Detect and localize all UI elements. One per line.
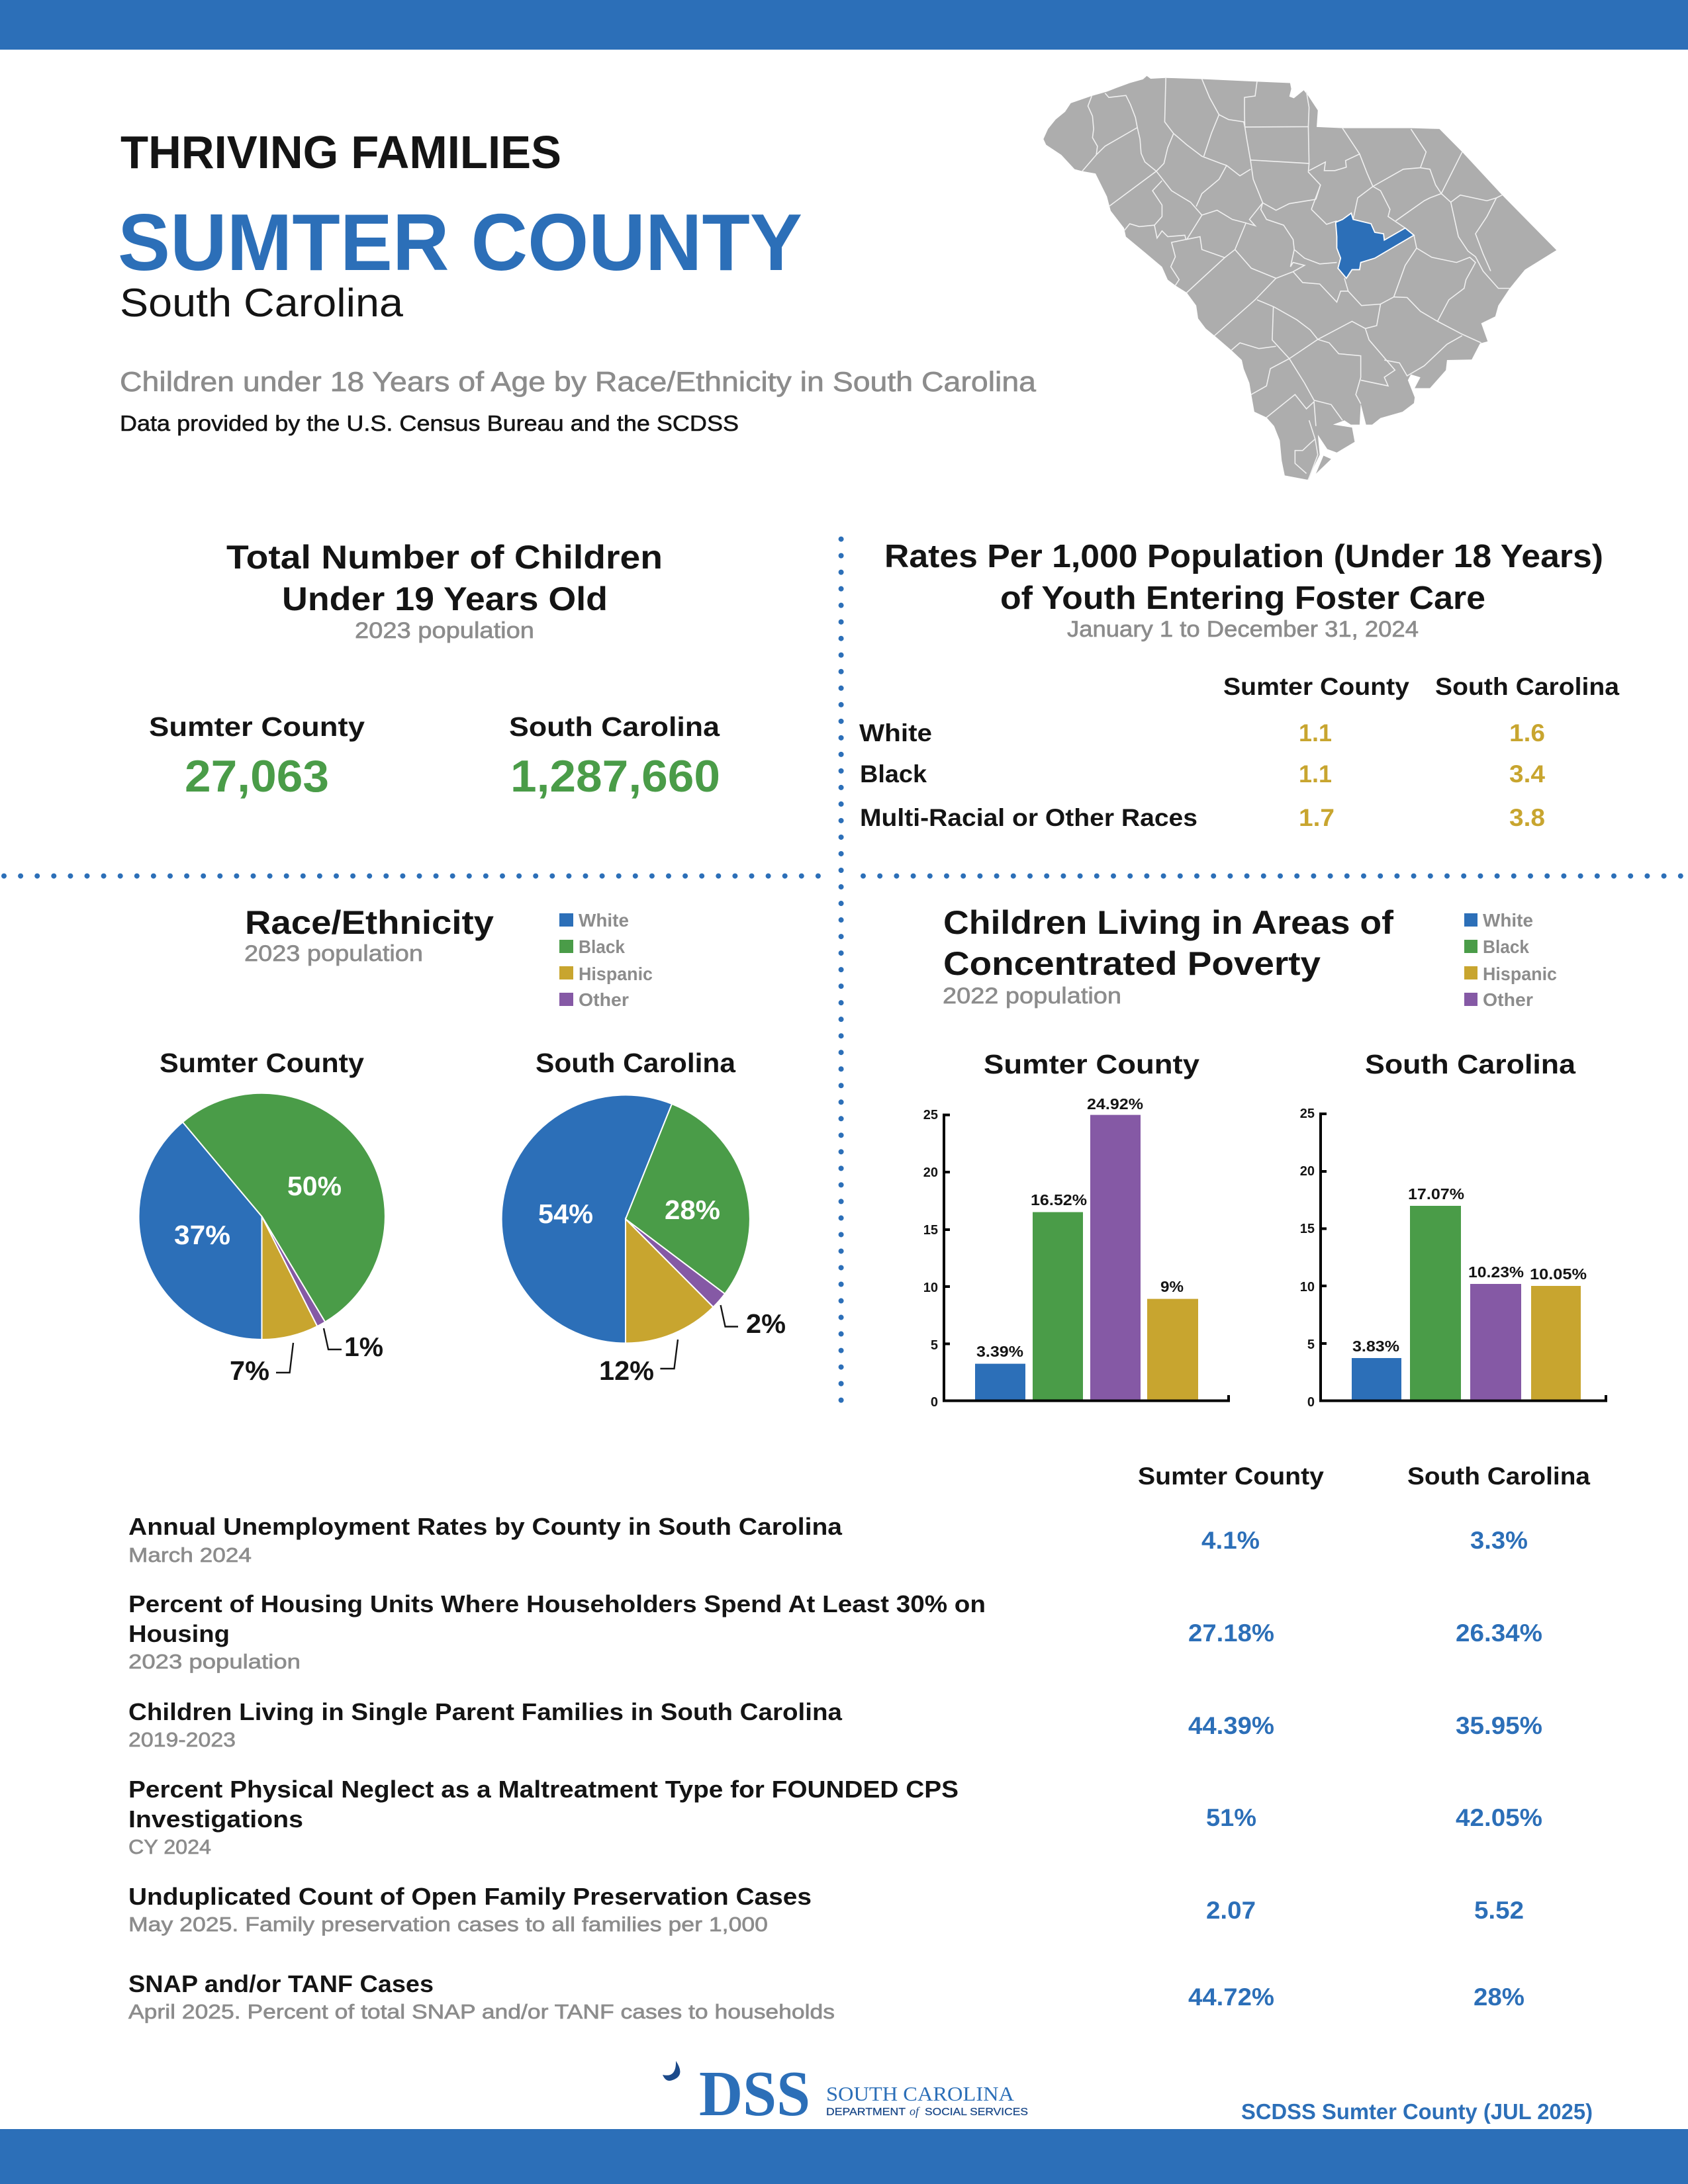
row: single parent families: Children Living in Single Parent Families in South Carolina (128, 1698, 843, 1725)
chart title: South Carolina: South Carolina (536, 1048, 736, 1078)
row: SNAP and TANF: SNAP and/or TANF Cases (128, 1970, 434, 1997)
state subtitle: South Carolina (120, 281, 404, 325)
row: physical neglect (128, 1776, 1542, 1858)
pie chart: Sumter County (139, 1093, 385, 1340)
row: physical neglect: CY 2024 (128, 1835, 211, 1858)
row: SNAP and TANF: 28% (1474, 1983, 1524, 2011)
row: housing cost: 2023 population (128, 1650, 301, 1673)
pie callout: 12% (599, 1340, 678, 1386)
row: White: 1.1 (1299, 719, 1332, 747)
subheading: 2023 population (244, 941, 423, 966)
row: single parent families: 44.39% (1188, 1712, 1274, 1739)
bar chart: South Carolina: 0 (1307, 1395, 1315, 1410)
pie chart: Sumter County: 37% (174, 1220, 230, 1250)
row: physical neglect: 51% (1206, 1804, 1256, 1831)
Sumter County highlight (1336, 213, 1414, 278)
chart title: South Carolina: South Carolina (1365, 1049, 1576, 1079)
row: SNAP and TANF (128, 1970, 1524, 2023)
bar chart: South Carolina: 10.23% (1468, 1263, 1524, 1281)
heading: Children Living in Areas of (943, 904, 1393, 941)
row: Multi-Racial or Other Races: Multi-Racial or Other Races (860, 804, 1197, 831)
bar chart: Sumter County: 3.39% (976, 1343, 1023, 1360)
heading line 2: Under 19 Years Old (282, 580, 608, 617)
row: Black: Black (860, 760, 927, 788)
subheading: 2023 population (355, 618, 534, 643)
legend: Black (579, 936, 625, 957)
description: Children under 18 Years of Age by Race/Ethnicity in South Carolina (120, 366, 1037, 397)
row: White: White (859, 719, 932, 747)
map: South Carolina counties with Sumter highlighted (1043, 76, 1556, 480)
column header: Sumter County: Sumter County (1138, 1463, 1324, 1490)
bar chart: Sumter County: 0 (931, 1395, 938, 1410)
row: Black: 1.1 (1299, 760, 1332, 788)
heading: Rates Per 1,000 Population (Under 18 Years) (884, 539, 1603, 574)
heading: Race/Ethnicity (245, 904, 494, 941)
bar chart: Sumter County: 10 (923, 1281, 938, 1295)
DSS wordmark: DSS (699, 2058, 810, 2130)
row: unemployment (128, 1513, 1528, 1567)
bar chart: South Carolina: 15 (1300, 1222, 1315, 1236)
pie callout: 1%: 1% (344, 1332, 383, 1362)
bar chart: Sumter County: 25 (923, 1108, 938, 1122)
heading: Total Number of Children (226, 539, 663, 576)
bar chart: South Carolina: 10.05% (1530, 1265, 1587, 1283)
bar chart: Sumter County (923, 1095, 1229, 1410)
row: Black (860, 760, 1545, 788)
row: housing cost: 27.18% (1188, 1619, 1274, 1647)
value: South Carolina: 1,287,660 (510, 751, 720, 801)
bar chart: South Carolina: 25 (1300, 1107, 1315, 1121)
agency department line: SOCIAL SERVICES (925, 2107, 1028, 2118)
footer document code: SCDSS Sumter County (JUL 2025) (1241, 2099, 1593, 2124)
legend: Hispanic (1483, 964, 1557, 984)
chart title: Sumter County: Sumter County (160, 1048, 364, 1078)
panel: indicators table (128, 1463, 1590, 2023)
pie callout: 7% (230, 1343, 293, 1386)
heading line 2: of Youth Entering Foster Care (1000, 580, 1485, 616)
row: White (859, 719, 1545, 747)
bar chart: Sumter County: 16.52% (1031, 1191, 1087, 1208)
row: SNAP and TANF: 44.72% (1188, 1983, 1274, 2011)
legend (1464, 910, 1557, 1010)
row: Multi-Racial or Other Races: 1.7 (1299, 804, 1335, 831)
pie chart: South Carolina: 28% (665, 1195, 720, 1225)
row: housing cost: Percent of Housing Units Where Householders Spend At Least 30% on (128, 1590, 986, 1617)
row: Black: 3.4 (1509, 760, 1545, 788)
row: White: 1.6 (1509, 719, 1545, 747)
legend: White (1483, 910, 1533, 931)
agency department line: DEPARTMENT (826, 2107, 906, 2118)
column header: Sumter County: Sumter County (1223, 673, 1409, 700)
panel: total number of children (149, 539, 720, 801)
top banner (0, 0, 1688, 50)
panel: concentrated poverty (923, 904, 1606, 1410)
row: unemployment: 4.1% (1201, 1527, 1260, 1554)
bar chart: South Carolina: 10 (1300, 1280, 1315, 1295)
row: single parent families (128, 1698, 1542, 1751)
column header: South Carolina: South Carolina (1435, 673, 1619, 700)
agency department line (826, 2105, 1028, 2118)
subheading: 2022 population (943, 983, 1121, 1009)
heading line 2: Concentrated Poverty (943, 945, 1321, 982)
header block (118, 126, 1037, 435)
row: family preservation: 2.07 (1206, 1897, 1256, 1924)
row: family preservation (128, 1883, 1524, 1936)
agency department line: of (910, 2105, 921, 2118)
row: family preservation: Unduplicated Count of Open Family Preservation Cases (128, 1883, 812, 1910)
bar chart: Sumter County: 24.92% (1087, 1095, 1143, 1113)
pie callout: 2% (721, 1305, 786, 1339)
legend: Hispanic (579, 964, 653, 984)
bar chart: South Carolina: 3.83% (1352, 1338, 1399, 1355)
pie callout: 7%: 7% (230, 1355, 269, 1386)
row: single parent families: 35.95% (1456, 1712, 1542, 1739)
pie callout: 12%: 12% (599, 1355, 654, 1386)
bar chart: Sumter County: 9% (1160, 1278, 1184, 1295)
bar chart: Sumter County: 15 (923, 1223, 938, 1238)
logo: SC DSS (663, 2058, 1028, 2130)
row: unemployment: Annual Unemployment Rates by County in South Carolina (128, 1513, 843, 1540)
row: housing cost (128, 1590, 1542, 1673)
row: Multi-Racial or Other Races (860, 804, 1545, 831)
row: physical neglect: Percent Physical Neglect as a Maltreatment Type for FOUNDED CPS (128, 1776, 959, 1803)
value: Sumter County: 27,063 (185, 751, 329, 801)
icon: crescent moon (663, 2061, 680, 2081)
bottom banner (0, 2129, 1688, 2184)
bar chart: South Carolina: 5 (1307, 1338, 1315, 1352)
title: SUMTER COUNTY (118, 197, 802, 287)
row: unemployment: March 2024 (128, 1543, 252, 1567)
chart title: Sumter County: Sumter County (984, 1049, 1199, 1079)
eyebrow title: THRIVING FAMILIES (120, 126, 561, 178)
pie chart: South Carolina (502, 1095, 750, 1343)
pie callout: 1% (324, 1328, 383, 1362)
row: unemployment: 3.3% (1470, 1527, 1528, 1554)
row: housing cost: 26.34% (1456, 1619, 1542, 1647)
legend: Black (1483, 936, 1529, 957)
row: Multi-Racial or Other Races: 3.8 (1509, 804, 1545, 831)
label: South Carolina: South Carolina (509, 711, 720, 742)
legend: White (579, 910, 629, 931)
panel: foster care rates (859, 539, 1619, 831)
row: physical neglect: Investigations (128, 1805, 303, 1833)
row: family preservation: May 2025. Family preservation cases to all families per 1,000 (128, 1913, 768, 1936)
legend: Other (1483, 989, 1533, 1010)
bar chart: Sumter County: 5 (931, 1338, 938, 1353)
row: SNAP and TANF: April 2025. Percent of total SNAP and/or TANF cases to households (128, 2000, 835, 2023)
agency name: SOUTH CAROLINA (826, 2082, 1015, 2105)
bar chart: Sumter County: 20 (923, 1165, 938, 1180)
label: Sumter County: Sumter County (149, 711, 365, 742)
bar chart: South Carolina: 17.07% (1408, 1185, 1464, 1203)
row: housing cost: Housing (128, 1620, 230, 1647)
row: single parent families: 2019-2023 (128, 1728, 236, 1751)
pie chart: South Carolina: 54% (538, 1199, 593, 1229)
legend (559, 910, 653, 1010)
row: family preservation: 5.52 (1474, 1897, 1524, 1924)
column header: South Carolina: South Carolina (1407, 1463, 1590, 1490)
bar chart: South Carolina: 20 (1300, 1164, 1315, 1179)
panel: race/ethnicity (139, 904, 786, 1386)
pie callout: 2%: 2% (746, 1308, 786, 1339)
pie chart: Sumter County: 50% (287, 1171, 342, 1201)
legend: Other (579, 989, 629, 1010)
row: physical neglect: 42.05% (1456, 1804, 1542, 1831)
subheading: January 1 to December 31, 2024 (1067, 617, 1419, 642)
source note: Data provided by the U.S. Census Bureau and the SCDSS (120, 411, 739, 435)
bar chart: South Carolina (1300, 1107, 1606, 1410)
